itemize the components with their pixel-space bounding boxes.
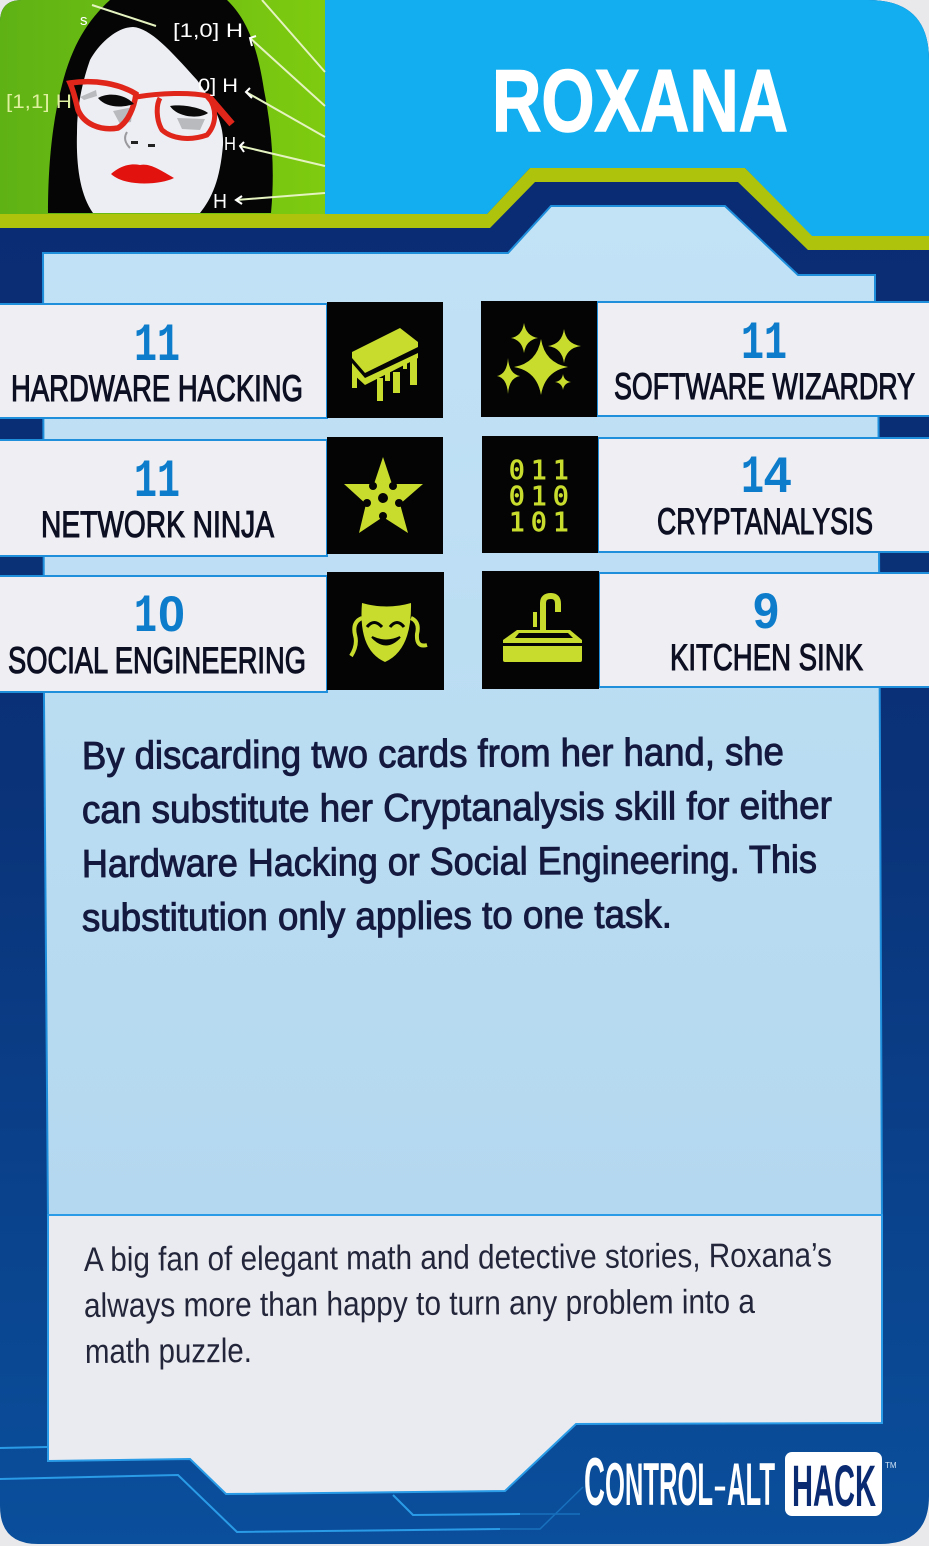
- skill row: hardware hacking: [0, 302, 443, 418]
- icon: shuriken: [344, 457, 423, 533]
- ability text: Hardware Hacking or Social Engineering. This: [82, 839, 817, 886]
- trademark: TM: [885, 1461, 897, 1470]
- olive stripe: [0, 168, 929, 250]
- digit 1: 1: [741, 448, 764, 509]
- value: 11: [134, 452, 180, 513]
- ability text: [82, 731, 832, 940]
- label box: [0, 440, 327, 556]
- flavor text: math puzzle.: [85, 1332, 252, 1371]
- nostrils: [131, 141, 155, 147]
- label box: [598, 438, 929, 552]
- icon: chip: [352, 328, 418, 401]
- name: KITCHEN SINK: [670, 637, 863, 678]
- value: 11: [741, 314, 787, 375]
- formula text: s: [80, 12, 88, 29]
- value: 11: [134, 316, 180, 377]
- label box: [0, 576, 327, 692]
- nose: [125, 132, 130, 148]
- light blue main panel: [43, 206, 882, 1220]
- fading traces: [500, 1487, 583, 1529]
- formula lines: [92, 0, 325, 204]
- logo: CONTROL: [584, 1444, 713, 1520]
- glasses arm: [208, 96, 232, 124]
- name: SOCIAL ENGINEERING: [8, 640, 306, 681]
- icon tile: [481, 301, 597, 417]
- formula text: [6, 12, 243, 213]
- formula text: H: [213, 191, 227, 213]
- title: ROXANA: [492, 51, 788, 150]
- digit 0: 0: [158, 586, 185, 642]
- right eye: [170, 105, 208, 117]
- left eye: [98, 95, 134, 106]
- portrait of Roxana: [0, 0, 325, 214]
- formula text: 0] H: [198, 76, 238, 97]
- arrow lines: [92, 0, 325, 200]
- eyes: [98, 95, 208, 117]
- skill row: social engineering: [0, 572, 444, 692]
- formula text: H: [224, 134, 236, 154]
- icon: theatre mask: [351, 603, 427, 662]
- logo wordmark: hyphen: -: [713, 1457, 727, 1513]
- digit 1: 1: [134, 587, 157, 648]
- face: [77, 27, 223, 213]
- icon: binary digits: 101: [509, 508, 569, 538]
- eye shadows: [80, 90, 205, 130]
- icon: binary digits: 011: [509, 456, 569, 486]
- flavor text: [84, 1236, 832, 1371]
- left lens frame: [70, 82, 136, 129]
- icon: sparkles: [497, 323, 581, 395]
- portrait background: [0, 0, 325, 214]
- value: [134, 586, 185, 648]
- right lens frame: [136, 93, 215, 138]
- icon tile: [482, 571, 599, 689]
- flavor text: always more than happy to turn any problem into a: [84, 1283, 755, 1325]
- icon tile: [327, 437, 443, 554]
- flavor text: A big fan of elegant math and detective stories, Roxana’s: [84, 1236, 832, 1279]
- logo badge: [785, 1452, 882, 1516]
- ability text: By discarding two cards from her hand, she: [82, 731, 784, 778]
- skill row: software wizardry: [481, 301, 929, 417]
- hair: [48, 0, 273, 213]
- value: [741, 447, 791, 509]
- label box: [597, 302, 929, 416]
- skill row: network ninja: [0, 437, 443, 556]
- labels: [1,0] H: [173, 21, 243, 42]
- name: HARDWARE HACKING: [11, 368, 303, 409]
- digit 4: 4: [764, 447, 791, 503]
- name: NETWORK NINJA: [41, 504, 274, 545]
- logo: ALT: [727, 1451, 775, 1518]
- icon: sink: [503, 596, 582, 662]
- icon tile: [327, 302, 443, 418]
- inner traces: [393, 1495, 520, 1515]
- label box: [0, 304, 327, 418]
- icon tile: [482, 436, 598, 553]
- icon: binary digits: [509, 456, 569, 538]
- ability text: can substitute her Cryptanalysis skill for either: [82, 784, 832, 832]
- value: 9: [753, 583, 779, 639]
- formula text: [1,1] H: [6, 92, 72, 113]
- glasses: [70, 82, 232, 138]
- header: blue title area: [325, 0, 929, 237]
- ability text: substitution only applies to one task.: [82, 893, 672, 940]
- white flavor panel: [48, 1215, 882, 1494]
- icon: binary digits: 010: [509, 482, 569, 512]
- skill row: kitchen sink: [482, 571, 929, 689]
- left and bottom traces: [0, 1447, 500, 1532]
- lips: [111, 164, 174, 184]
- skill row: cryptanalysis: [482, 436, 929, 553]
- circuit lines: [0, 1447, 583, 1532]
- icon tile: [327, 572, 444, 690]
- arrow heads: [236, 36, 256, 204]
- label box: [599, 573, 929, 687]
